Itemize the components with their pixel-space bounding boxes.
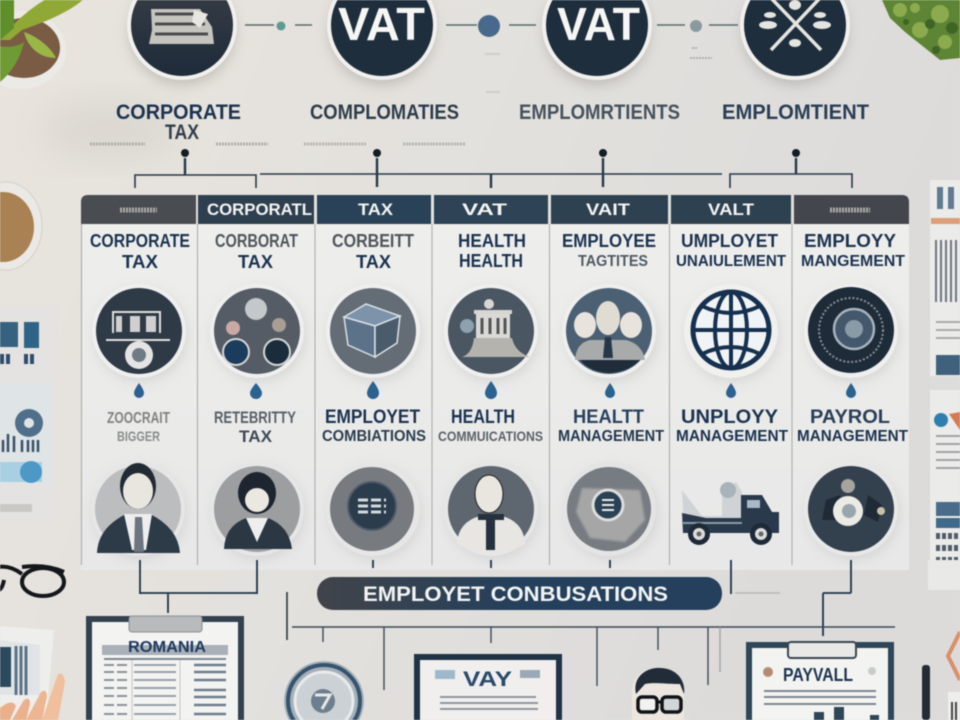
row 2 labels: HEALTT [573, 406, 644, 428]
decoration: glasses [0, 566, 64, 596]
icon: box [326, 284, 420, 380]
decoration: small sticky sheet [928, 560, 960, 590]
table panel background [81, 224, 909, 570]
clipboard: Romania table [89, 616, 241, 720]
table header row: TAX [358, 201, 393, 219]
icon: businesswoman [210, 462, 304, 558]
top circle: corporate tax icon [127, 0, 237, 84]
row 2 labels: BIGGER [117, 428, 160, 444]
connector pins under the table [140, 560, 851, 640]
table column dividers [82, 224, 792, 565]
monitor: VAY report [417, 657, 559, 720]
figure: man with glasses [632, 668, 684, 720]
top circle: crossed tools icon [740, 0, 850, 84]
table header row: VAT [462, 201, 507, 219]
icon: gear and wrench [804, 462, 898, 558]
icon: money seal [562, 462, 657, 558]
droplets [134, 381, 856, 399]
row 2 labels: TAX [239, 428, 272, 446]
row 1 labels: CORPORATE [90, 230, 190, 251]
decoration: pen [922, 665, 930, 720]
clipboard: Romania table: ROMANIA [128, 639, 206, 656]
top label: employments: EMPLOMRTIENTS [519, 101, 680, 124]
decoration: orange clip and barcode bottom right [948, 632, 960, 720]
icon: businessman [91, 462, 185, 558]
row 1 labels: TAX [238, 251, 274, 272]
icon: coins cluster [210, 284, 304, 380]
top label: corporate tax: CORPORATE [116, 101, 241, 124]
row 1 labels: CORBEITT [332, 230, 415, 251]
clipboard: Payroll chart: PAYVALL [783, 665, 853, 685]
row 2 labels: PAYROL [810, 406, 890, 428]
icon: dark dial [804, 284, 898, 380]
row 1 labels: HEALTH [459, 250, 523, 271]
top label: corporate tax [90, 101, 268, 144]
row 2 labels: MANAGEMENT [676, 428, 789, 445]
row 2 labels: EMPLOYET [325, 406, 420, 428]
clipboard: Payroll chart [749, 642, 891, 720]
row 2 labels: RETEBRITTY [214, 409, 296, 427]
top circle: VAT badge [327, 0, 437, 84]
icon: worker [444, 462, 538, 558]
icon: globe [684, 284, 778, 380]
icon: building and seal [92, 284, 186, 380]
decoration: coffee cup left [0, 182, 42, 270]
icon: compass badge [284, 661, 364, 720]
row 1 labels: CORBORAT [215, 230, 299, 251]
row 2 labels: MANAGEMENT [558, 428, 664, 445]
row 1 labels: UNAIULEMENT [676, 253, 787, 270]
decoration: plant top right [882, 0, 960, 60]
top label: employment: EMPLOMTIENT [722, 101, 869, 124]
row 2 labels: HEALTH [451, 406, 515, 428]
icon: three people [562, 284, 657, 380]
row 1 labels: TAX [356, 251, 392, 272]
connector tree above the table [135, 149, 852, 188]
decoration: potted plant top left [0, 0, 85, 89]
icon: truck [682, 482, 779, 545]
table header row: VAIT [586, 201, 630, 219]
row 2 labels: ZOOCRAIT [107, 410, 170, 427]
table header row [81, 195, 909, 224]
row 1 labels: EMPLOYY [804, 230, 897, 251]
banner pill: EMPLOYET CONBUSATIONS [363, 583, 668, 606]
table header row: VALT [708, 201, 754, 219]
decoration: report sheets right [930, 180, 960, 590]
row 1 labels: UMPLOYET [681, 230, 779, 251]
row 2 labels [107, 406, 909, 446]
top connectors between circles [245, 15, 738, 92]
banner pill [317, 577, 722, 610]
table header row: CORPORATL [207, 201, 312, 219]
icon: bank building [444, 284, 538, 380]
row 1 labels: TAX [122, 251, 159, 272]
row 1 labels: TAGTITES [578, 253, 648, 270]
decoration: report sheets left [0, 305, 57, 520]
icon: emblem [326, 462, 420, 558]
monitor: VAY report: VAY [463, 668, 512, 691]
row 1 labels: MANGEMENT [801, 253, 906, 270]
row 1 labels: EMPLOYEE [562, 230, 656, 251]
row 1 labels [90, 230, 906, 272]
top label: complomaties: COMPLOMATIES [310, 101, 459, 124]
row 2 labels: COMMUICATIONS [438, 428, 543, 444]
row 2 labels: COMBIATIONS [322, 428, 426, 445]
connector bus below the banner [292, 627, 895, 690]
decoration: chart sheet and hand bottom left [0, 626, 65, 720]
row 2 labels: UNPLOYY [681, 406, 778, 428]
row 1 labels: HEALTH [458, 230, 526, 251]
top label: corporate tax: TAX [165, 121, 199, 144]
top circle: second VAT badge [542, 0, 652, 84]
row 2 labels: MANAGEMENT [797, 428, 909, 445]
